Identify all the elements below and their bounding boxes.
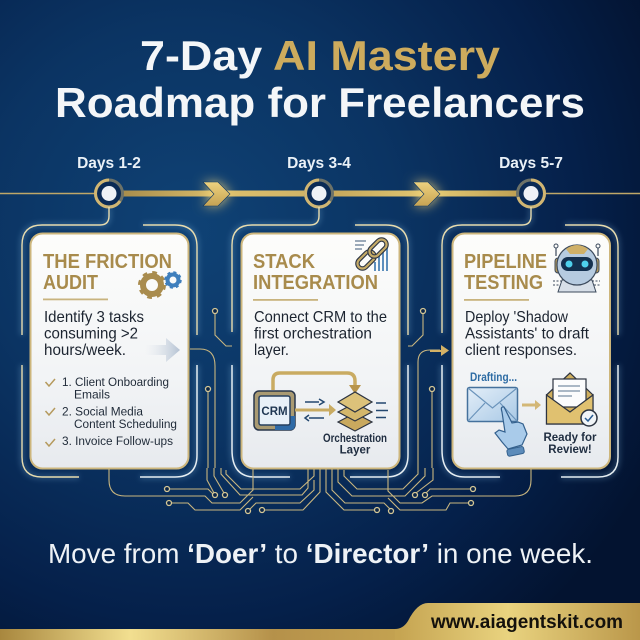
checklist: 2. Social Media <box>62 404 143 418</box>
arrow: into card 3 <box>430 345 449 356</box>
arrow: faint right <box>145 338 180 362</box>
card background <box>30 234 188 468</box>
heading <box>464 250 547 294</box>
panel: stack integration <box>242 234 400 468</box>
side connectors <box>190 308 440 468</box>
heading: PIPELINE <box>464 250 547 273</box>
label: orchestration layer: Orchestration <box>323 433 387 445</box>
checklist: 1. Client Onboarding <box>62 375 169 389</box>
arrow: top loop <box>273 373 355 390</box>
icon: closed envelope <box>468 388 518 422</box>
website url: www.aiagentskit.com <box>430 612 623 633</box>
heading <box>43 250 172 294</box>
body text: consuming >2 <box>44 326 138 342</box>
arrow: gold right <box>522 400 541 410</box>
label: drafting: Drafting... <box>470 372 517 384</box>
icon: robot hand <box>495 407 527 457</box>
timeline thin lines <box>0 192 640 194</box>
divider <box>253 299 318 301</box>
icon: layer stack <box>338 392 372 431</box>
label: ready for review <box>543 432 597 456</box>
day label: Days 3-4: Days 3-4 <box>287 155 351 172</box>
arrow: chevron one <box>203 182 230 206</box>
body text: Identify 3 tasks <box>44 309 144 326</box>
panel: the friction audit <box>30 234 188 468</box>
panel: pipeline testing <box>452 234 610 468</box>
title: Roadmap for Freelancers <box>55 79 585 126</box>
timeline thick segment one <box>122 190 305 196</box>
checklist: Content Scheduling <box>74 417 177 431</box>
heading: AUDIT <box>43 271 98 294</box>
body text: hours/week. <box>44 342 126 359</box>
label: ready for review: Ready for <box>543 432 597 444</box>
heading: THE FRICTION <box>43 250 172 273</box>
title: 7-Day AI Mastery <box>140 32 501 79</box>
checklist <box>46 375 177 448</box>
label: orchestration layer: Layer <box>340 444 371 456</box>
arrow: chevron two <box>413 182 440 206</box>
body text: Assistants' to draft <box>465 326 590 342</box>
body text: layer. <box>254 342 289 359</box>
body text <box>254 309 387 359</box>
timeline <box>0 155 640 207</box>
divider <box>464 299 529 301</box>
node: day 1 <box>96 180 122 207</box>
body text <box>465 309 590 359</box>
gold tab <box>395 603 640 640</box>
body text: Deploy 'Shadow <box>465 309 568 326</box>
icon: robot <box>553 244 601 292</box>
gold strip <box>0 629 420 640</box>
icon: open envelope <box>546 373 597 426</box>
body text: client responses. <box>465 342 577 359</box>
card background <box>242 234 400 468</box>
heading <box>253 250 378 294</box>
title <box>55 32 585 126</box>
card background <box>452 234 610 468</box>
icon: crm chip: CRM <box>261 406 288 418</box>
diagram: drafting to review <box>468 372 597 457</box>
node: day 3 <box>518 180 544 207</box>
divider <box>43 298 108 300</box>
node: day 2 <box>306 180 332 207</box>
circuit traces <box>109 308 531 514</box>
heading: TESTING <box>464 271 543 294</box>
heading: STACK <box>253 250 315 273</box>
label: ready for review: Review! <box>548 444 592 456</box>
card frames <box>22 207 618 477</box>
body text: first orchestration <box>254 326 372 342</box>
heading: INTEGRATION <box>253 271 378 294</box>
day label: Days 5-7: Days 5-7 <box>499 155 563 172</box>
diagram: crm to orchestration <box>254 373 388 456</box>
checklist: Emails <box>74 388 110 402</box>
footer bar <box>0 603 640 640</box>
body text: Connect CRM to the <box>254 309 387 326</box>
timeline thick segment two <box>332 190 517 196</box>
label: orchestration layer <box>323 433 387 456</box>
day label: Days 1-2: Days 1-2 <box>77 155 141 172</box>
tagline: Move from ‘Doer’ to ‘Director’ in one week. <box>48 538 593 569</box>
icon: chain link <box>355 237 389 271</box>
circuit end nodes <box>164 486 476 514</box>
small arrows <box>305 399 388 421</box>
icon: gears <box>140 272 180 297</box>
arrow: middle gold <box>295 404 336 416</box>
body text <box>44 309 144 359</box>
checklist: 3. Invoice Follow-ups <box>62 434 173 448</box>
